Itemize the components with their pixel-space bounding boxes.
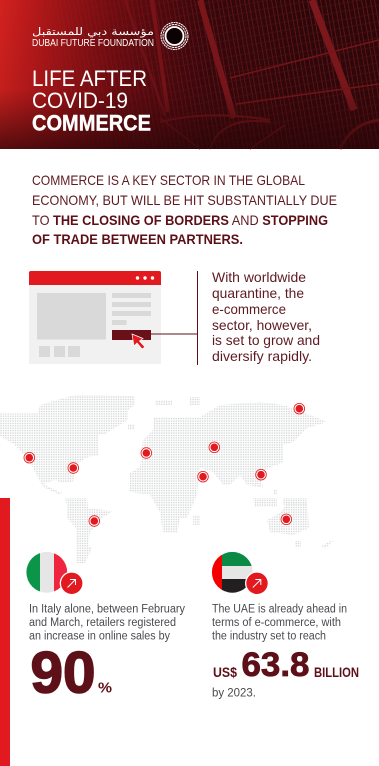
title: LIFE AFTER [32,66,147,91]
map location pins [24,403,305,526]
e-commerce text block: is set to grow and [212,332,320,348]
UAE text: terms of e-commerce, with [212,617,341,629]
icon: e-commerce browser window [29,271,161,364]
intro paragraph: TO THE CLOSING OF BORDERS AND STOPPING [32,212,328,228]
Italy text: and March, retailers registered [29,617,176,629]
UAE text: The UAE is already ahead in [212,604,347,616]
e-commerce text block: e-commerce [212,301,286,317]
header banner with shopping cart photo [0,0,379,149]
intro paragraph: OF TRADE BETWEEN PARTNERS. [32,231,243,247]
stat: US$ 63.8 billion: US$ [213,664,237,680]
e-commerce text block [212,269,320,364]
e-commerce text block: sector, however, [212,317,312,333]
e-commerce text block: diversify rapidly. [212,348,312,364]
intro paragraph: ECONOMY, BUT WILL BE HIT SUBSTANTIALLY DUE [32,192,337,208]
title: COMMERCE [32,110,151,136]
title: COVID-19 [32,88,128,113]
red side bar [0,498,10,766]
icon: UAE flag with arrow badge [211,552,269,595]
logo: Dubai Future Foundation: مؤسسة دبي للمستقبل [32,26,154,38]
dotted world map [0,395,333,563]
logo: Dubai Future Foundation [32,22,188,50]
intro paragraph: COMMERCE IS A KEY SECTOR IN THE GLOBAL [32,172,305,188]
intro paragraph [32,172,337,247]
UAE text: the industry set to reach [212,630,326,642]
stat: US$ 63.8 billion: BILLION [314,664,359,680]
stat: 90%: % [98,680,112,697]
e-commerce text block: quarantine, the [212,285,304,301]
icon: Italy flag with arrow badge [26,552,84,595]
Italy text: In Italy alone, between February [29,604,185,616]
stat: US$ 63.8 billion: 63.8 [242,646,310,684]
connector line [151,271,198,365]
title [32,66,151,136]
stat: 90%: 90 [30,640,96,706]
e-commerce text block: With worldwide [212,269,306,285]
UAE text: by 2023. [212,688,256,700]
Italy text: an increase in online sales by [29,630,170,642]
stat: US$ 63.8 billion [213,646,359,684]
logo: Dubai Future Foundation: DUBAI FUTURE FOUNDATION [32,38,154,49]
UAE text [212,604,347,700]
Italy text [29,604,185,642]
